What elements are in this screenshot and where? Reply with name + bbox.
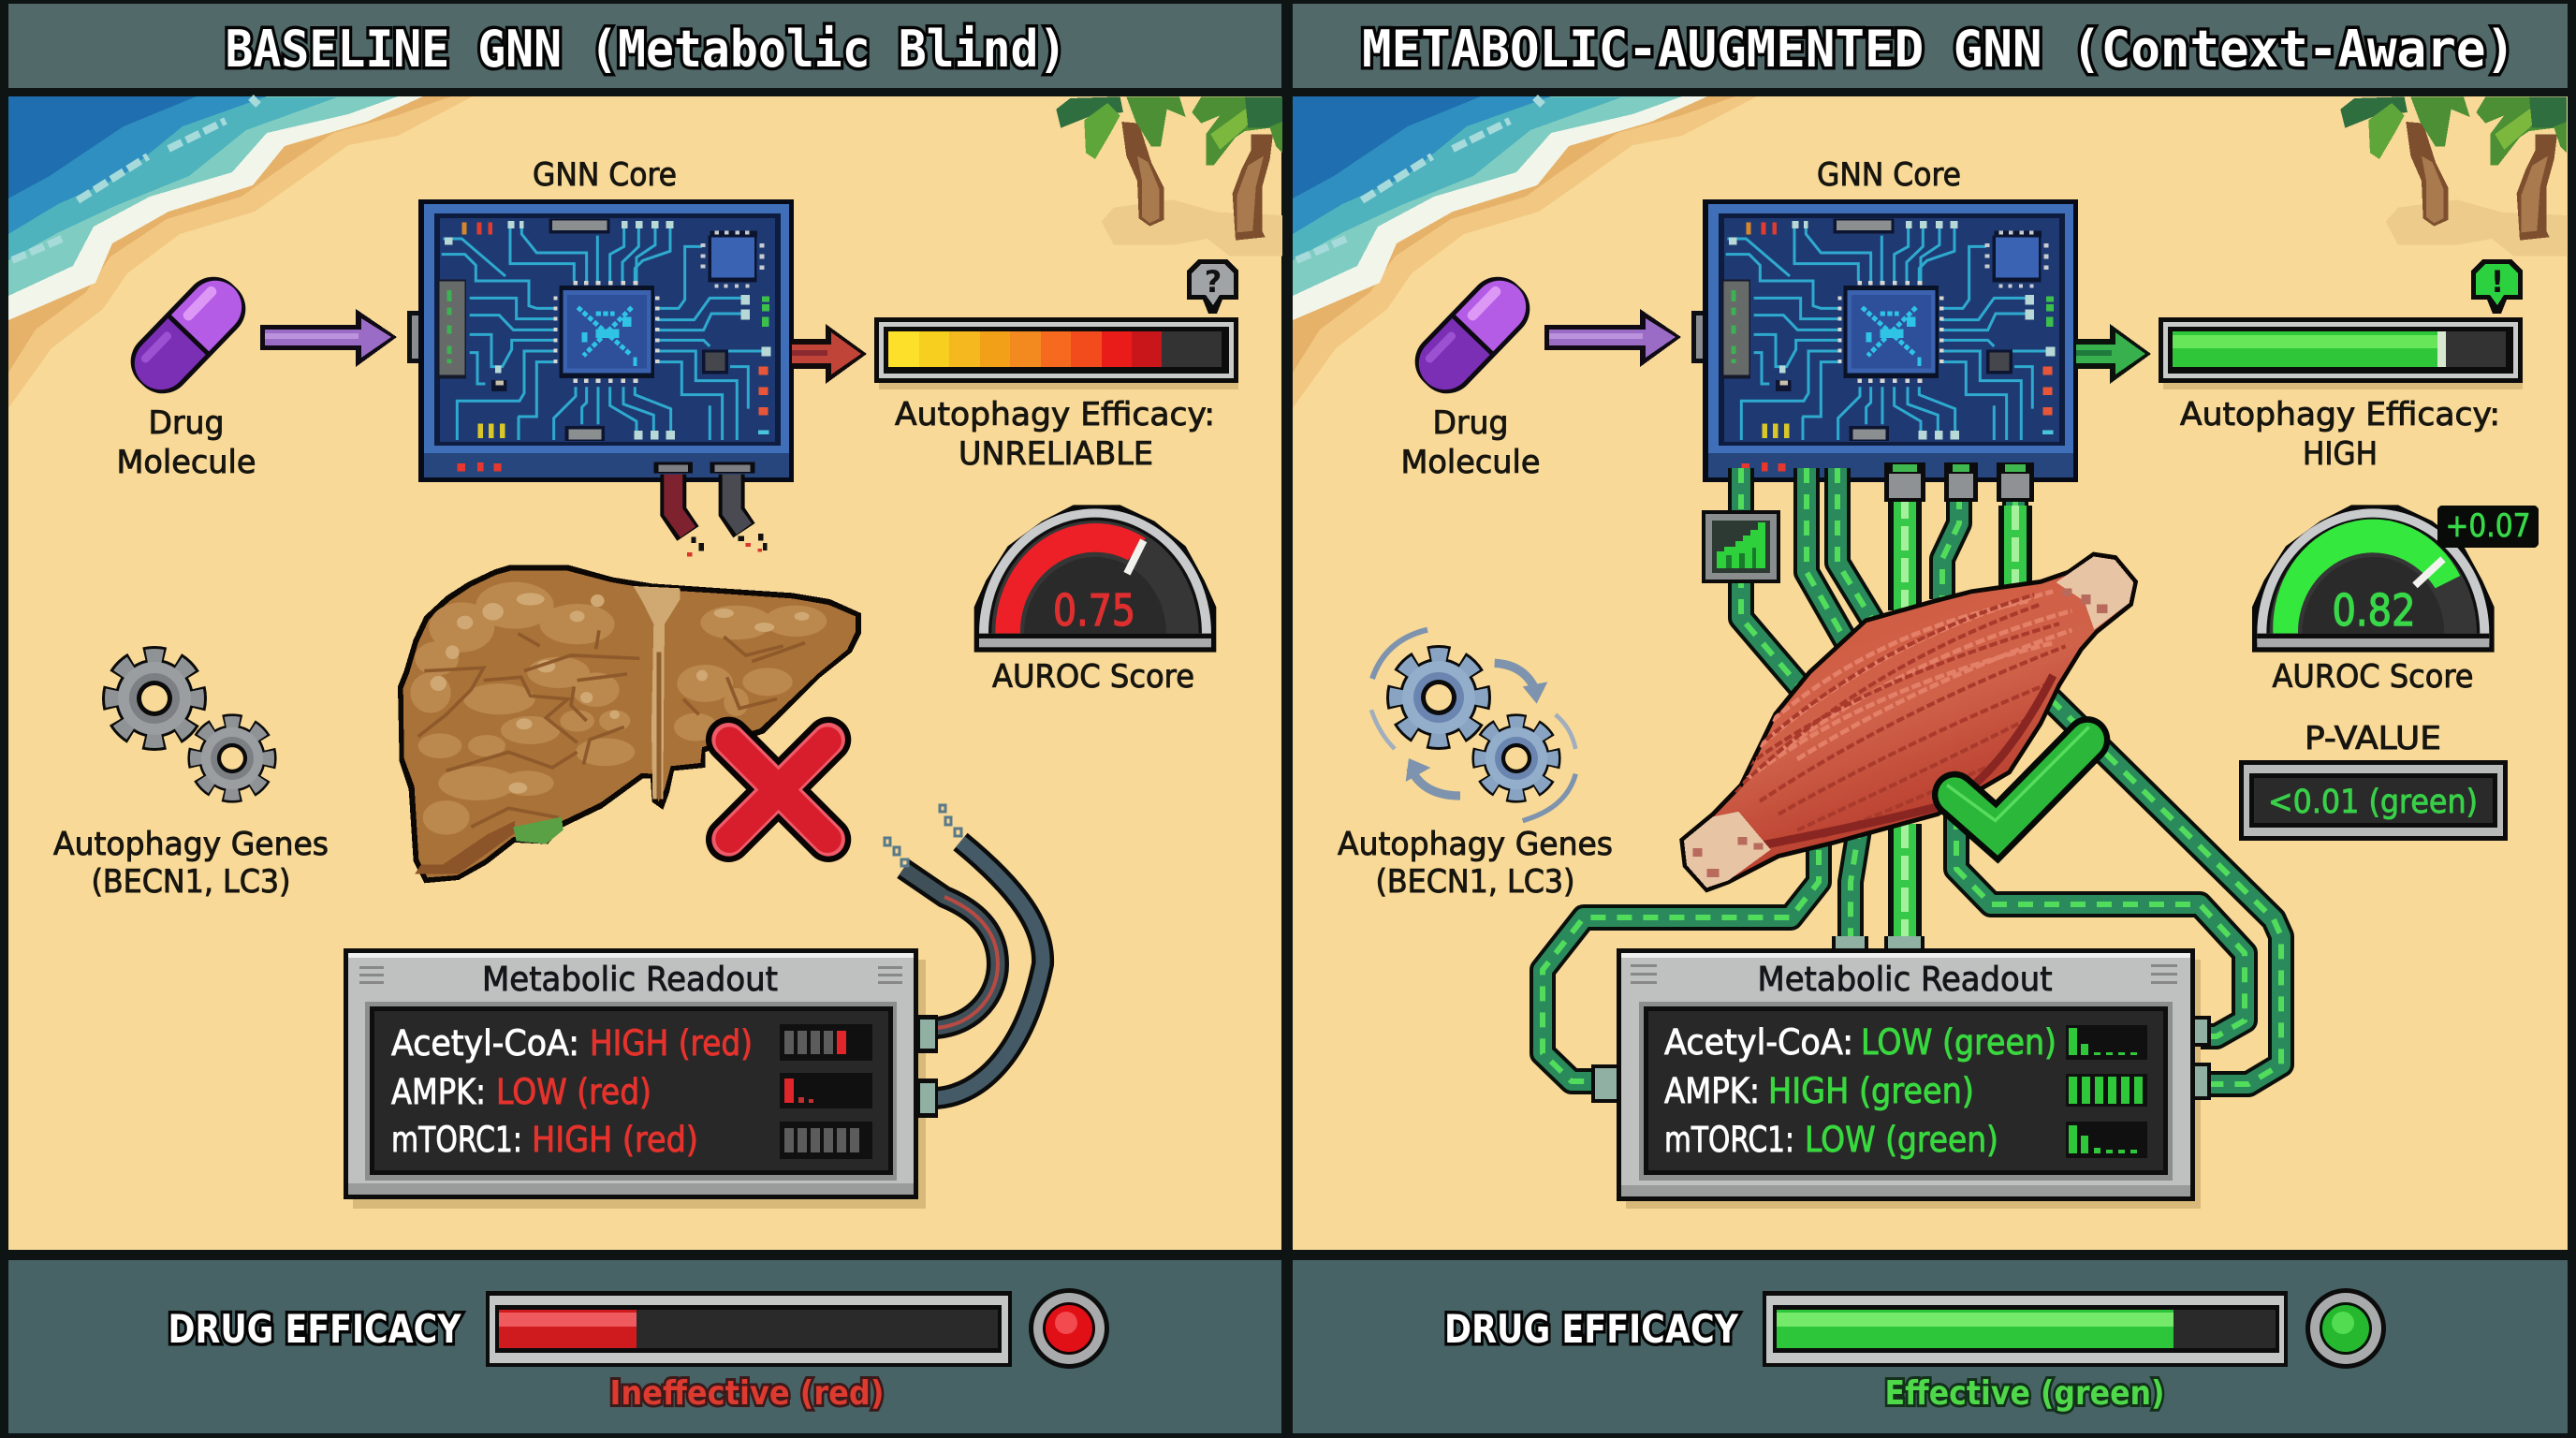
- drug molecule label: Molecule: [1400, 444, 1541, 481]
- status label: effective: Effective (green): [1885, 1374, 2164, 1413]
- row: AMPK: AMPK:: [1664, 1071, 1760, 1111]
- row: AMPK: HIGH (green): [1768, 1071, 1974, 1111]
- autophagy efficacy label: UNRELIABLE: [959, 435, 1153, 473]
- efficacy meter: unreliable: [874, 317, 1238, 389]
- autophagy genes label: (BECN1, LC3): [1376, 863, 1574, 901]
- row: AMPK: LOW (red): [496, 1072, 651, 1112]
- autophagy efficacy label: HIGH: [2303, 435, 2378, 473]
- status light: red: [1029, 1288, 1109, 1369]
- output arrow: high: [2076, 324, 2151, 384]
- autophagy efficacy label: [2180, 396, 2500, 473]
- row: mTORC1: HIGH (red): [532, 1120, 698, 1160]
- value: 0.75: 0.75: [1053, 585, 1135, 636]
- panel: baseline GNN: [8, 4, 1282, 1433]
- icon: drug capsule: [119, 265, 257, 405]
- icon: question badge: ?: [1205, 264, 1222, 300]
- mini monitor chart: [1702, 510, 1780, 583]
- icon: question badge: [1187, 259, 1238, 314]
- gauge: AUROC 0.75: [974, 505, 1216, 653]
- P-value heading: P-VALUE: [2305, 720, 2441, 757]
- right palm trees: [2340, 96, 2567, 256]
- AUROC label: AUROC Score: [992, 658, 1194, 696]
- autophagy genes label: Autophagy Genes: [1338, 826, 1613, 863]
- icon: exclamation badge: !: [2491, 264, 2504, 300]
- drug molecule label: [116, 404, 256, 481]
- AUROC label: AUROC Score: [2273, 658, 2473, 696]
- icon: drug capsule: [1403, 265, 1542, 405]
- icon: red X: [728, 740, 828, 840]
- panel: metabolic readout (baseline): [344, 948, 938, 1209]
- left ocean and shoreline: [8, 96, 473, 408]
- icon: blue gears with motion arrows: [1371, 630, 1575, 821]
- autophagy genes label: Autophagy Genes: [53, 826, 329, 863]
- mini meters (baseline): [780, 1024, 872, 1159]
- drug molecule label: [1400, 404, 1541, 481]
- drug efficacy bar: green: [1763, 1291, 2288, 1367]
- row: mTORC1: [1664, 1120, 1998, 1160]
- right footer band: [1293, 1260, 2568, 1433]
- row: mTORC1: mTORC1:: [391, 1120, 522, 1160]
- row: Acetyl-CoA: Acetyl-CoA:: [391, 1023, 579, 1064]
- readout title: Metabolic Readout: [482, 961, 778, 999]
- readout title: Metabolic Readout: [1758, 961, 2052, 999]
- row: AMPK: [391, 1072, 651, 1112]
- autophagy genes label: [53, 826, 329, 901]
- left header band: [8, 4, 1281, 88]
- pipe couplers on core: [1884, 462, 2034, 502]
- left palm trees: [1056, 96, 1282, 256]
- efficacy meter: high: [2159, 317, 2523, 389]
- row: mTORC1: [391, 1120, 698, 1160]
- autophagy efficacy label: Autophagy Efficacy:: [895, 396, 1215, 433]
- left footer band: [8, 1260, 1281, 1433]
- panel: metabolic readout (augmented): [1591, 936, 2211, 1209]
- row: Acetyl-CoA: [391, 1023, 753, 1064]
- circuit board: GNN core: [407, 199, 794, 482]
- title: augmented: METABOLIC-AUGMENTED GNN (Context-Aware): [1362, 20, 2515, 79]
- autophagy efficacy label: [895, 396, 1215, 473]
- row: mTORC1: LOW (green): [1805, 1120, 1998, 1160]
- left beach background: [8, 96, 1281, 1250]
- row: Acetyl-CoA: LOW (green): [1861, 1022, 2056, 1063]
- drug molecule label: Drug: [148, 404, 225, 442]
- arrow: drug to core: [260, 309, 397, 367]
- drug molecule label: Molecule: [116, 444, 256, 481]
- right header band: [1293, 4, 2568, 88]
- GNN core label: GNN Core: [533, 156, 677, 194]
- icon: grey gears: [113, 657, 267, 793]
- P-value box: <0.01 (green): [2268, 784, 2478, 821]
- panel: metabolic-augmented GNN: [1293, 4, 2568, 1433]
- circuit board: GNN core: [1691, 199, 2078, 482]
- mini meters (augmented): [2066, 1025, 2147, 1158]
- row: Acetyl-CoA: HIGH (red): [590, 1023, 753, 1064]
- row: mTORC1: mTORC1:: [1664, 1120, 1794, 1160]
- P-value box: [2239, 760, 2508, 841]
- row: Acetyl-CoA: [1664, 1022, 2056, 1063]
- GNN core label: GNN Core: [1817, 156, 1961, 194]
- drug efficacy label: DRUG EFFICACY: [168, 1306, 461, 1352]
- autophagy genes label: (BECN1, LC3): [92, 863, 290, 901]
- drug molecule label: Drug: [1432, 404, 1509, 442]
- drug efficacy bar: red: [486, 1291, 1012, 1367]
- broken cables from readout: [885, 805, 1043, 1098]
- muscle: [1682, 554, 2136, 890]
- title: baseline: BASELINE GNN (Metabolic Blind): [225, 20, 1067, 79]
- icon: green check: [1947, 727, 2089, 832]
- gauge: AUROC 0.82: [2252, 505, 2495, 653]
- drug efficacy label: DRUG EFFICACY: [1444, 1306, 1738, 1352]
- row: AMPK: [1664, 1071, 1974, 1111]
- row: Acetyl-CoA: Acetyl-CoA:: [1664, 1022, 1853, 1063]
- autophagy genes label: [1338, 826, 1613, 901]
- autophagy efficacy label: Autophagy Efficacy:: [2180, 396, 2500, 433]
- status light: green: [2305, 1288, 2386, 1369]
- right beach background: [1293, 96, 2568, 1250]
- frayed cables under core: [653, 462, 768, 557]
- arrow: drug to core: [1544, 309, 1681, 367]
- row: AMPK: AMPK:: [391, 1072, 486, 1112]
- liver: [398, 565, 861, 883]
- value: 0.82: 0.82: [2333, 585, 2415, 636]
- output arrow: unreliable: [792, 324, 867, 384]
- right ocean and shoreline: [1293, 96, 1757, 408]
- green data pipes: [1543, 468, 2281, 1084]
- icon: exclamation badge: [2471, 259, 2523, 314]
- delta badge: +0.07: +0.07: [2445, 507, 2531, 545]
- status label: ineffective: Ineffective (red): [610, 1374, 884, 1413]
